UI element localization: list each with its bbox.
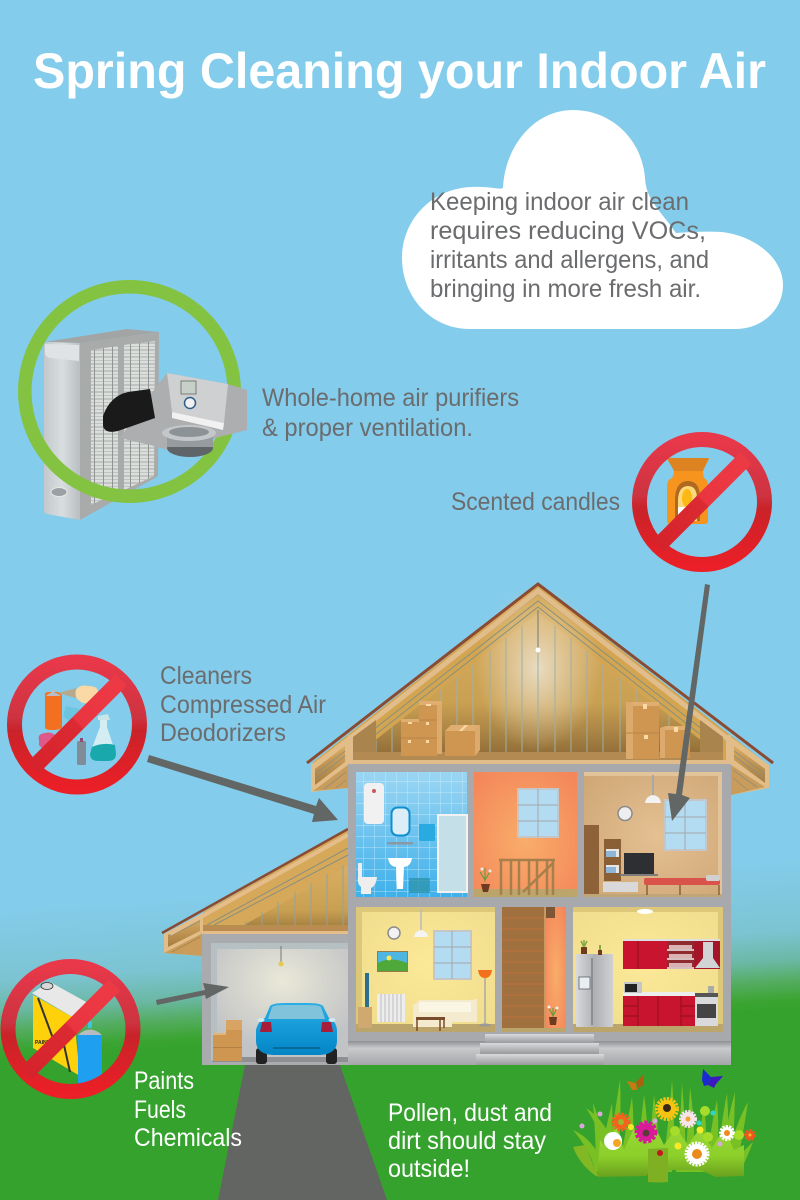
cloud text: Keeping indoor air clean — [430, 188, 689, 216]
cloud callout — [402, 110, 783, 329]
text: pollen message: dirt should stay — [388, 1127, 546, 1155]
left eave — [311, 737, 348, 792]
living TV — [365, 973, 369, 1007]
bedroom door — [584, 825, 599, 894]
kitchen — [573, 907, 723, 1032]
counter and base cabinets — [623, 992, 695, 996]
cloud text — [430, 188, 709, 303]
cloud text: bringing in more fresh air. — [430, 275, 701, 303]
coffee table — [416, 1017, 445, 1020]
stairs plant — [549, 1008, 557, 1018]
text: pollen message: outside! — [388, 1155, 470, 1183]
white daisy large — [687, 1144, 707, 1164]
fridge — [576, 954, 613, 1027]
white daisy right — [721, 1127, 733, 1139]
living clock — [388, 927, 400, 939]
no sign: scented candles — [640, 440, 764, 564]
arrow: to garage — [156, 983, 229, 1005]
tub — [409, 878, 430, 893]
grass blades — [573, 1080, 753, 1172]
right eave — [731, 737, 769, 795]
living window — [434, 931, 471, 979]
ladybug — [657, 1150, 663, 1156]
purifier front door — [44, 342, 80, 520]
magenta flower — [637, 1123, 655, 1141]
text: air purifiers: & proper ventilation. — [262, 414, 473, 442]
shower — [438, 815, 467, 892]
upper cabinets — [623, 939, 720, 941]
towel — [419, 824, 435, 841]
house walls — [348, 764, 731, 1041]
staircase — [502, 907, 566, 1032]
yellow flower — [658, 1100, 676, 1118]
garage light — [280, 946, 282, 962]
garage eave — [164, 913, 203, 956]
garage — [202, 934, 348, 1065]
car body — [256, 1003, 337, 1055]
text: pollen message: Pollen, dust and — [388, 1099, 552, 1127]
no sign: paints and fuels — [8, 966, 133, 1092]
blue car — [256, 1003, 337, 1064]
sink — [388, 858, 412, 889]
foundation — [348, 1041, 731, 1065]
text: cleaners: Deodorizers — [160, 719, 286, 747]
toilet — [358, 863, 377, 894]
ceiling light — [637, 909, 653, 914]
orange flower right — [746, 1131, 754, 1139]
bedroom radiator — [603, 882, 638, 892]
text: air purifiers — [262, 384, 519, 442]
prohibition bar — [33, 680, 121, 768]
landscape picture — [378, 952, 408, 972]
garage boxes — [213, 1020, 242, 1061]
attic boxes — [401, 701, 690, 759]
car tail lights — [260, 1022, 272, 1032]
text: cleaners: Compressed Air — [160, 691, 326, 719]
front steps — [476, 1034, 604, 1065]
black damper — [103, 389, 155, 432]
paint can: PAINT — [35, 1040, 50, 1046]
air purifier with green ring — [25, 287, 247, 520]
car wheels — [256, 1048, 267, 1064]
pink-white flower — [681, 1112, 695, 1126]
fridge plants — [581, 947, 587, 954]
prohibition ring — [640, 440, 764, 564]
radiator — [377, 994, 405, 1022]
ventilation control duct — [103, 373, 247, 457]
driveway — [218, 1065, 387, 1200]
cleaning products icon — [39, 686, 116, 765]
butterfly blue — [702, 1069, 723, 1088]
bookcase — [604, 839, 621, 881]
candle burner icon — [667, 458, 709, 524]
bedroom window — [665, 800, 706, 850]
flowers and grass — [573, 1069, 754, 1182]
stair railing — [499, 860, 555, 895]
purifier top — [45, 329, 159, 343]
attic — [307, 584, 773, 764]
orange flower — [614, 1115, 628, 1129]
prohibition ring — [14, 662, 140, 787]
stove and oven — [695, 993, 718, 1026]
landing window — [518, 789, 558, 837]
range hood — [695, 942, 720, 968]
green ring — [25, 287, 234, 496]
living room — [356, 907, 495, 1032]
grass leaves — [573, 1145, 598, 1176]
text: paints, fuels, chemicals: Paints — [134, 1067, 194, 1095]
attic light — [537, 610, 539, 650]
spray can — [78, 1021, 102, 1084]
cloud text: irritants and allergens, and — [430, 246, 709, 274]
text: paints, fuels, chemicals — [134, 1067, 242, 1152]
car mirrors — [258, 1018, 264, 1022]
house — [162, 584, 773, 1065]
prohibition bar — [658, 458, 746, 546]
title: Spring Cleaning your Indoor Air — [33, 43, 766, 99]
landing plant — [480, 868, 491, 882]
small leaves and flowers — [580, 1106, 744, 1150]
text: air purifiers: Whole-home air purifiers — [262, 384, 519, 412]
prohibition ring — [8, 966, 133, 1092]
text: pollen message — [388, 1099, 552, 1183]
purifier filter media — [91, 346, 118, 505]
cloud shape — [402, 110, 783, 329]
sofa — [413, 998, 477, 1027]
text: scented candles: Scented candles — [451, 488, 620, 516]
arrow: to bathroom — [147, 755, 338, 822]
text: paints, fuels, chemicals: Fuels — [134, 1096, 186, 1124]
microwave — [624, 982, 642, 993]
text: cleaners: Cleaners — [160, 662, 252, 690]
mirror — [392, 808, 410, 836]
bedroom — [584, 772, 722, 897]
bed — [644, 878, 720, 885]
purifier filter frame — [80, 332, 159, 520]
landing room — [474, 772, 577, 897]
arrow: to bedroom — [668, 584, 710, 821]
bedroom TV — [624, 853, 654, 874]
prohibition bar — [26, 985, 114, 1073]
text: cleaners — [160, 662, 326, 747]
car window — [268, 1005, 325, 1019]
grass mass — [597, 1125, 744, 1177]
bedroom clock — [618, 806, 632, 820]
floor lamp — [484, 978, 486, 1025]
text: paints, fuels, chemicals: Chemicals — [134, 1124, 242, 1152]
cloud text: requires reducing VOCs, — [430, 217, 706, 245]
garage roof — [162, 829, 348, 956]
bathroom — [356, 772, 467, 897]
no sign: cleaners — [14, 662, 140, 787]
white flower left — [604, 1132, 622, 1150]
water heater — [364, 783, 384, 824]
living pendant lamp — [420, 909, 422, 931]
butterfly orange — [627, 1075, 644, 1090]
bedroom pendant lamp — [652, 775, 654, 796]
